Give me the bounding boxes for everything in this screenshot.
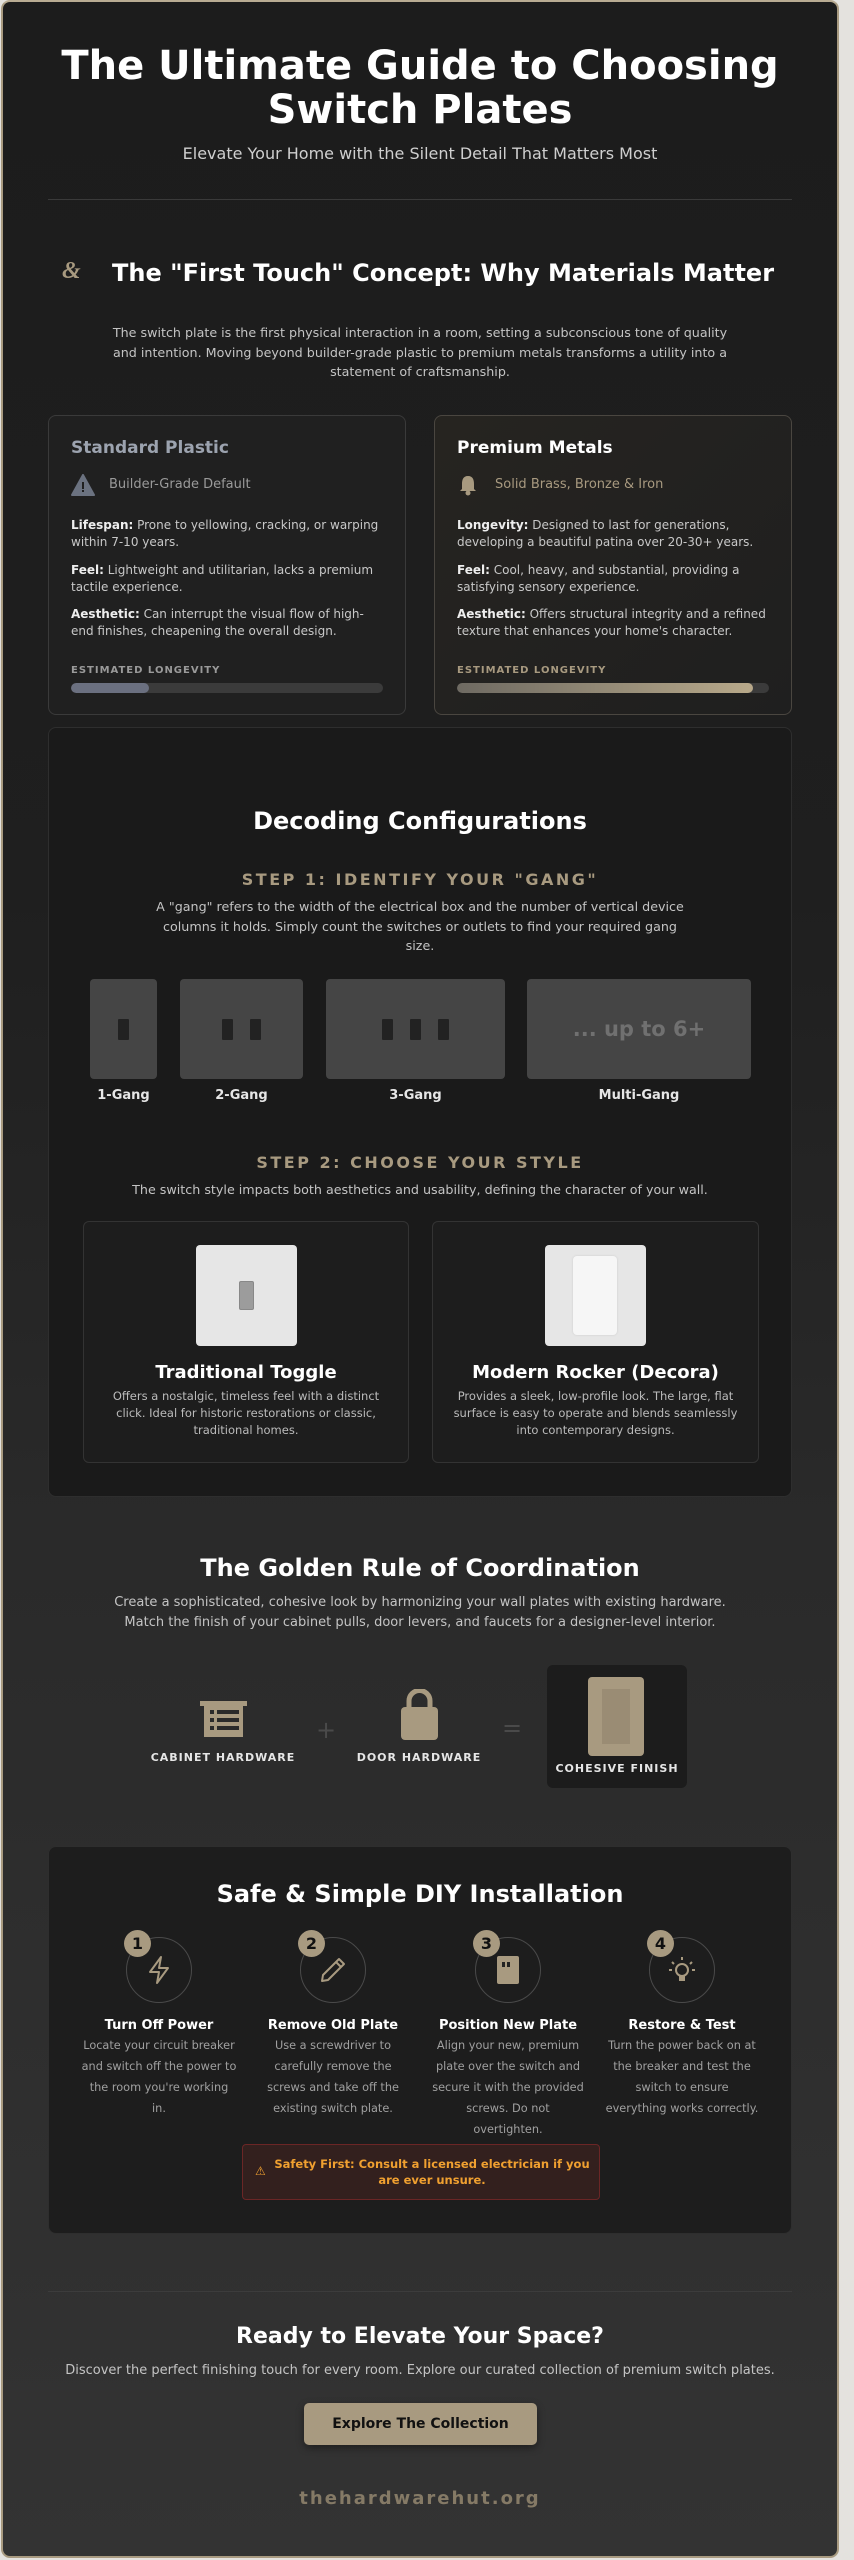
gang: 1: 1-Gang <box>97 1088 150 1103</box>
panel: DIY installation <box>48 1846 792 2234</box>
style card: rocker: Provides a sleek, low-profile look. The large, flat surface is easy to operate and blends seamlessly into contemporary designs. <box>454 1389 737 1437</box>
equals: = <box>502 1714 522 1742</box>
step 1: 1 <box>132 1934 143 1953</box>
icon: toggle plate <box>196 1245 297 1346</box>
title: The Ultimate Guide to Choosing <box>61 43 779 89</box>
panel: premium metals: ESTIMATED LONGEVITY <box>457 665 606 676</box>
step 2 text: The switch style impacts both aesthetics and usability, defining the character of your wall. <box>132 1182 708 1197</box>
style card: rocker: Modern Rocker (Decora) <box>472 1362 719 1383</box>
button <box>304 2403 537 2445</box>
icon: warning <box>71 474 251 496</box>
step 2: 2 <box>306 1934 317 1953</box>
panel: standard plastic: Aesthetic: Can interrupt the visual flow of high-end finishes, cheapening the overall design. <box>71 607 364 638</box>
step 1 heading: STEP 1: IDENTIFY YOUR "GANG" <box>242 870 598 889</box>
step 2 <box>267 1930 399 2115</box>
step 3: Position New Plate <box>439 2018 577 2033</box>
panel: decoding configurations <box>48 727 792 1497</box>
gang: 1 <box>90 979 157 1103</box>
panel: standard plastic: Lifespan: Prone to yellowing, cracking, or warping within 7-10 years. <box>71 518 378 549</box>
step 1: Turn Off Power <box>105 2018 213 2033</box>
icon: rocker plate <box>545 1245 646 1346</box>
style card: rocker <box>432 1221 759 1463</box>
gang: multi: ... up to 6+ <box>573 1017 705 1041</box>
style card: toggle <box>83 1221 409 1463</box>
icon: bell <box>460 476 663 496</box>
gang: 2 <box>180 979 303 1103</box>
icon: hand: & <box>62 258 81 284</box>
panel: standard plastic: Standard Plastic <box>71 438 229 458</box>
step 1: Locate your circuit breaker and switch off the power to the room you're working in. <box>82 2039 236 2115</box>
step 4: Restore & Test <box>628 2018 736 2033</box>
step 4: Turn the power back on at the breaker and test the switch to ensure everything works correctly. <box>606 2039 758 2115</box>
gang: 3 <box>326 979 505 1103</box>
heading: Decoding Configurations <box>253 807 587 835</box>
panel: premium metals: Premium Metals <box>457 438 613 458</box>
footer: thehardwarehut.org <box>299 2488 541 2509</box>
golden rule text: Create a sophisticated, cohesive look by harmonizing your wall plates with existing hardware. Match the finish of your cabinet pulls, door levers, and faucets for a designer-level interior. <box>114 1595 726 1630</box>
step 3 <box>432 1930 584 2136</box>
step 2: Remove Old Plate <box>268 2018 398 2033</box>
callout: safety <box>242 2144 600 2200</box>
heading: golden rule: The Golden Rule of Coordination <box>200 1554 640 1582</box>
bar: plastic longevity <box>71 683 383 693</box>
item: cohesive finish: COHESIVE FINISH <box>555 1762 679 1775</box>
style card: toggle: Traditional Toggle <box>155 1362 337 1383</box>
gang: 2: 2-Gang <box>215 1088 268 1103</box>
panel: premium metals: Feel: Cool, heavy, and substantial, providing a satisfying sensory experience. <box>457 563 739 594</box>
gang: 3: 3-Gang <box>389 1088 442 1103</box>
subtitle: Elevate Your Home with the Silent Detail That Matters Most <box>183 144 657 163</box>
CTA text: Discover the perfect finishing touch for every room. Explore our curated collection of premium switch plates. <box>65 2363 775 2378</box>
item: cohesive finish <box>547 1665 687 1788</box>
step 3: 3 <box>481 1934 492 1953</box>
item: cabinet hardware <box>151 1701 295 1764</box>
step 2 heading: STEP 2: CHOOSE YOUR STYLE <box>256 1153 584 1172</box>
button: Explore The Collection <box>332 2416 509 2432</box>
style card: toggle: Offers a nostalgic, timeless feel with a distinct click. Ideal for historic restorations or classic, traditional homes. <box>113 1389 379 1437</box>
step 4: 4 <box>655 1934 666 1953</box>
heading: CTA: Ready to Elevate Your Space? <box>236 2324 604 2349</box>
icon: bell: Solid Brass, Bronze & Iron <box>495 477 663 492</box>
panel: standard plastic <box>48 415 406 715</box>
gang: multi: Multi-Gang <box>599 1088 679 1103</box>
title: Switch Plates <box>268 87 572 133</box>
intro paragraph: The switch plate is the first physical interaction in a room, setting a subconscious tone of quality and intention. Moving beyond builder-grade plastic to premium metals transforms a utility into a statement of craftsmanship. <box>113 325 727 379</box>
panel: standard plastic: ESTIMATED LONGEVITY <box>71 665 220 676</box>
panel: standard plastic: Feel: Lightweight and utilitarian, lacks a premium tactile experience. <box>71 563 373 594</box>
callout: safety: Safety First: Consult a licensed electrician if you are ever unsure. <box>274 2157 590 2187</box>
plus: + <box>316 1716 336 1744</box>
callout: safety: ⚠ <box>255 2164 266 2178</box>
step 4 <box>606 1930 758 2115</box>
step 1 text: A "gang" refers to the width of the electrical box and the number of vertical device columns it holds. Simply count the switches or outlets to find your required gang size. <box>156 899 684 953</box>
step 1 <box>82 1930 236 2115</box>
heading: first touch: The "First Touch" Concept: Why Materials Matter <box>112 259 774 287</box>
item: door hardware <box>357 1689 481 1764</box>
item: door hardware: DOOR HARDWARE <box>357 1751 481 1764</box>
title <box>61 43 779 133</box>
panel: premium metals: Aesthetic: Offers structural integrity and a refined texture that enhances your home's character. <box>457 607 766 638</box>
panel: premium metals <box>434 415 792 715</box>
item: cabinet hardware: CABINET HARDWARE <box>151 1751 295 1764</box>
panel: premium metals: Longevity: Designed to last for generations, developing a beautiful patina over 20-30+ years. <box>457 518 753 549</box>
icon: warning: Builder-Grade Default <box>109 477 251 492</box>
step 2: Use a screwdriver to carefully remove the screws and take off the existing switch plate. <box>267 2039 399 2115</box>
bar: metal longevity <box>457 683 769 693</box>
heading: Safe & Simple DIY Installation <box>217 1880 623 1908</box>
step 3: Align your new, premium plate over the switch and secure it with the provided screws. Do not overtighten. <box>432 2039 584 2136</box>
gang: multi <box>527 979 751 1103</box>
